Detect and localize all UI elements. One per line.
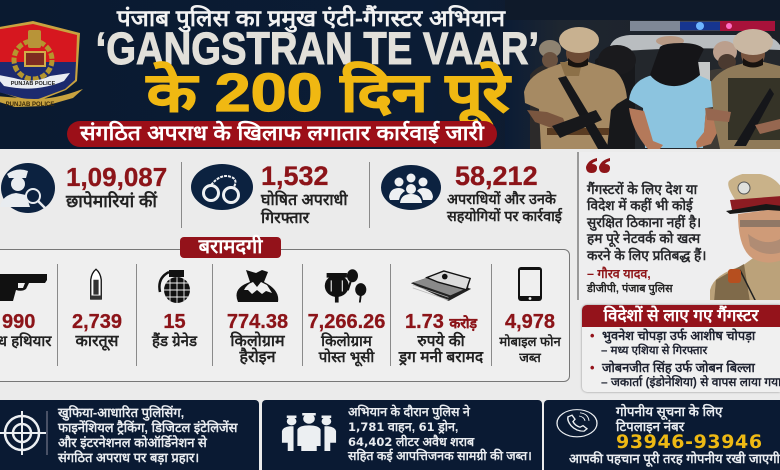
list item 1: भुवनेश चोपड़ा उर्फ आशीष चोपड़ा <box>602 328 755 343</box>
emblem: Punjab Police badge <box>0 21 83 108</box>
panel: brought from abroad <box>582 305 780 392</box>
panel heading: विदेशों से लाए गए गैंगस्टर <box>604 306 758 325</box>
quote text: करने के लिए प्रतिबद्ध हैं। <box>587 248 706 263</box>
quote attribution: डीजीपी, पंजाब पुलिस <box>587 283 673 295</box>
icon: cash stack <box>411 270 471 301</box>
text: सहित कई आपत्तिजनक सामग्री की जब्त। <box>348 449 532 463</box>
icon: group of people <box>381 165 441 210</box>
label <box>318 332 375 366</box>
quote attribution: – गौरव यादव, <box>587 267 651 281</box>
header banner <box>0 0 780 149</box>
icon: poppy pods <box>324 269 366 303</box>
label: गिरफ्तार <box>261 210 309 227</box>
quote text: सुरक्षित ठिकाना नहीं है। <box>587 215 701 230</box>
subtitle text: संगठित अपराध के खिलाफ लगातार कार्रवाई जारी <box>80 122 484 145</box>
value: 2,739 <box>72 311 122 333</box>
quote text <box>586 182 706 263</box>
panel: intelligence-based policing <box>0 400 259 470</box>
panel heading <box>582 305 780 327</box>
quote text: हम पूरे नेटवर्क को खत्म <box>587 231 700 246</box>
text <box>58 405 238 465</box>
icon: target <box>0 411 48 455</box>
recoveries heading <box>180 237 281 258</box>
officer left <box>524 27 627 149</box>
icon: phone <box>556 409 598 438</box>
value: 1,09,087 <box>66 162 167 192</box>
label: मोबाइल फोन <box>499 334 561 349</box>
heading line 3: के 200 दिन पूरे <box>147 63 509 123</box>
label: पोस्त भूसी <box>319 349 374 366</box>
label: रुपये की <box>417 333 465 350</box>
icon: pistol <box>0 274 47 301</box>
label: घोषित अपराधी <box>261 192 348 209</box>
tipline label <box>616 404 722 434</box>
icon: smartphone <box>518 267 542 301</box>
list item 2: – जकार्ता (इंडोनेशिया) से वापस लाया गया <box>601 375 780 389</box>
label: हैंड ग्रेनेड <box>152 333 197 350</box>
text: अभियान के दौरान पुलिस ने <box>348 405 470 419</box>
quote text: गैंगस्टरों के लिए देश या <box>587 182 697 197</box>
text: 64,402 लीटर अवैध शराब <box>348 435 474 449</box>
stat: arrests <box>191 161 348 227</box>
text <box>348 404 532 463</box>
label: सहयोगियों पर कार्रवाई <box>447 209 562 225</box>
item: heroin <box>227 270 288 366</box>
panel: campaign seizures <box>262 400 542 470</box>
label: जब्त <box>519 350 541 365</box>
privacy note: आपकी पहचान पूरी तरह गोपनीय रखी जाएगी <box>569 451 780 466</box>
recoveries heading: बरामदगी <box>199 236 262 258</box>
text: संगठित अपराध पर बड़ा प्रहार। <box>58 450 199 465</box>
list item 2 <box>590 360 780 389</box>
heading line 2: ‘GANGSTRAN TE VAAR’ <box>96 23 539 74</box>
list item 2: जोबनजीत सिंह उर्फ जोबन बिल्ला <box>602 360 755 375</box>
tipline number: 93946-93946 <box>616 431 763 453</box>
text: खुफिया-आधारित पुलिसिंग, <box>58 405 184 420</box>
label: ड्रग मनी बरामद <box>399 349 483 366</box>
value: 990 <box>2 311 35 333</box>
list item 1: – मध्य एशिया से गिरफ्तार <box>601 345 707 357</box>
text: और इंटरनेशनल कोऑर्डिनेशन से <box>58 435 207 450</box>
value: 15 <box>163 311 186 333</box>
label <box>398 332 484 366</box>
label: छापेमारियां कीं <box>66 191 157 211</box>
stat: associates <box>381 161 562 225</box>
icon: officer with magnifier <box>1 163 55 213</box>
icon: handcuffs <box>191 164 253 210</box>
text: 1,781 वाहन, 61 ड्रोन, <box>348 420 458 434</box>
header photo: police officers and masked accused <box>524 0 780 149</box>
item: illegal weapons <box>0 274 52 350</box>
value: 7,266.26 <box>308 311 385 333</box>
item: hand grenades <box>152 270 198 350</box>
item: mobile phones <box>499 267 562 365</box>
text: फाइनेंशियल ट्रैकिंग, डिजिटल इंटेलिजेंस <box>58 420 237 435</box>
emblem: Punjab Police badge: PUNJAB POLICE <box>11 81 56 87</box>
item: drug money <box>398 270 484 366</box>
panel: DGP quote <box>577 152 780 300</box>
portrait: DGP in uniform <box>710 174 780 300</box>
stat: raids <box>1 162 167 213</box>
value: 4,978 <box>505 311 555 333</box>
tipline label: टिपलाइन नंबर <box>616 419 684 434</box>
quote attribution <box>586 266 673 296</box>
label: किलोग्राम <box>321 333 372 350</box>
icon: three officers <box>282 413 336 451</box>
quote text: विदेश में कहीं भी कोई <box>587 198 693 213</box>
label: किलोग्राम <box>230 333 285 350</box>
label: कारतूस <box>76 333 118 350</box>
list item 1: • <box>590 328 594 343</box>
accused in blue t-shirt <box>629 43 725 149</box>
subtitle pill <box>67 121 497 147</box>
label: अपराधियों और उनके <box>447 192 556 208</box>
emblem: Punjab Police badge: PUNJAB POLICE <box>6 102 54 108</box>
list item 1 <box>590 328 756 357</box>
list item 2: • <box>590 360 594 375</box>
icon: grenade <box>158 270 190 303</box>
item: cartridges <box>72 268 122 351</box>
icon: sack <box>236 270 278 302</box>
tipline label: गोपनीय सूचना के लिए <box>616 404 722 419</box>
label <box>260 190 348 227</box>
officer right <box>705 29 780 149</box>
heading line 1: पंजाब पुलिस का प्रमुख एंटी-गैंगस्टर अभियान <box>117 5 505 31</box>
icon: bullet <box>90 268 102 300</box>
panel: recoveries <box>0 249 570 382</box>
panel: tipline <box>544 400 780 470</box>
label: हैरोइन <box>240 349 275 366</box>
value: 1,532 <box>261 161 329 191</box>
label <box>446 190 562 225</box>
item: poppy husk <box>308 269 385 366</box>
value: 58,212 <box>455 161 538 191</box>
icon: quote mark <box>586 158 610 173</box>
label <box>499 334 562 365</box>
value: 1.73 करोड़ <box>405 311 477 333</box>
value: 774.38 <box>227 311 288 333</box>
label <box>230 331 286 366</box>
